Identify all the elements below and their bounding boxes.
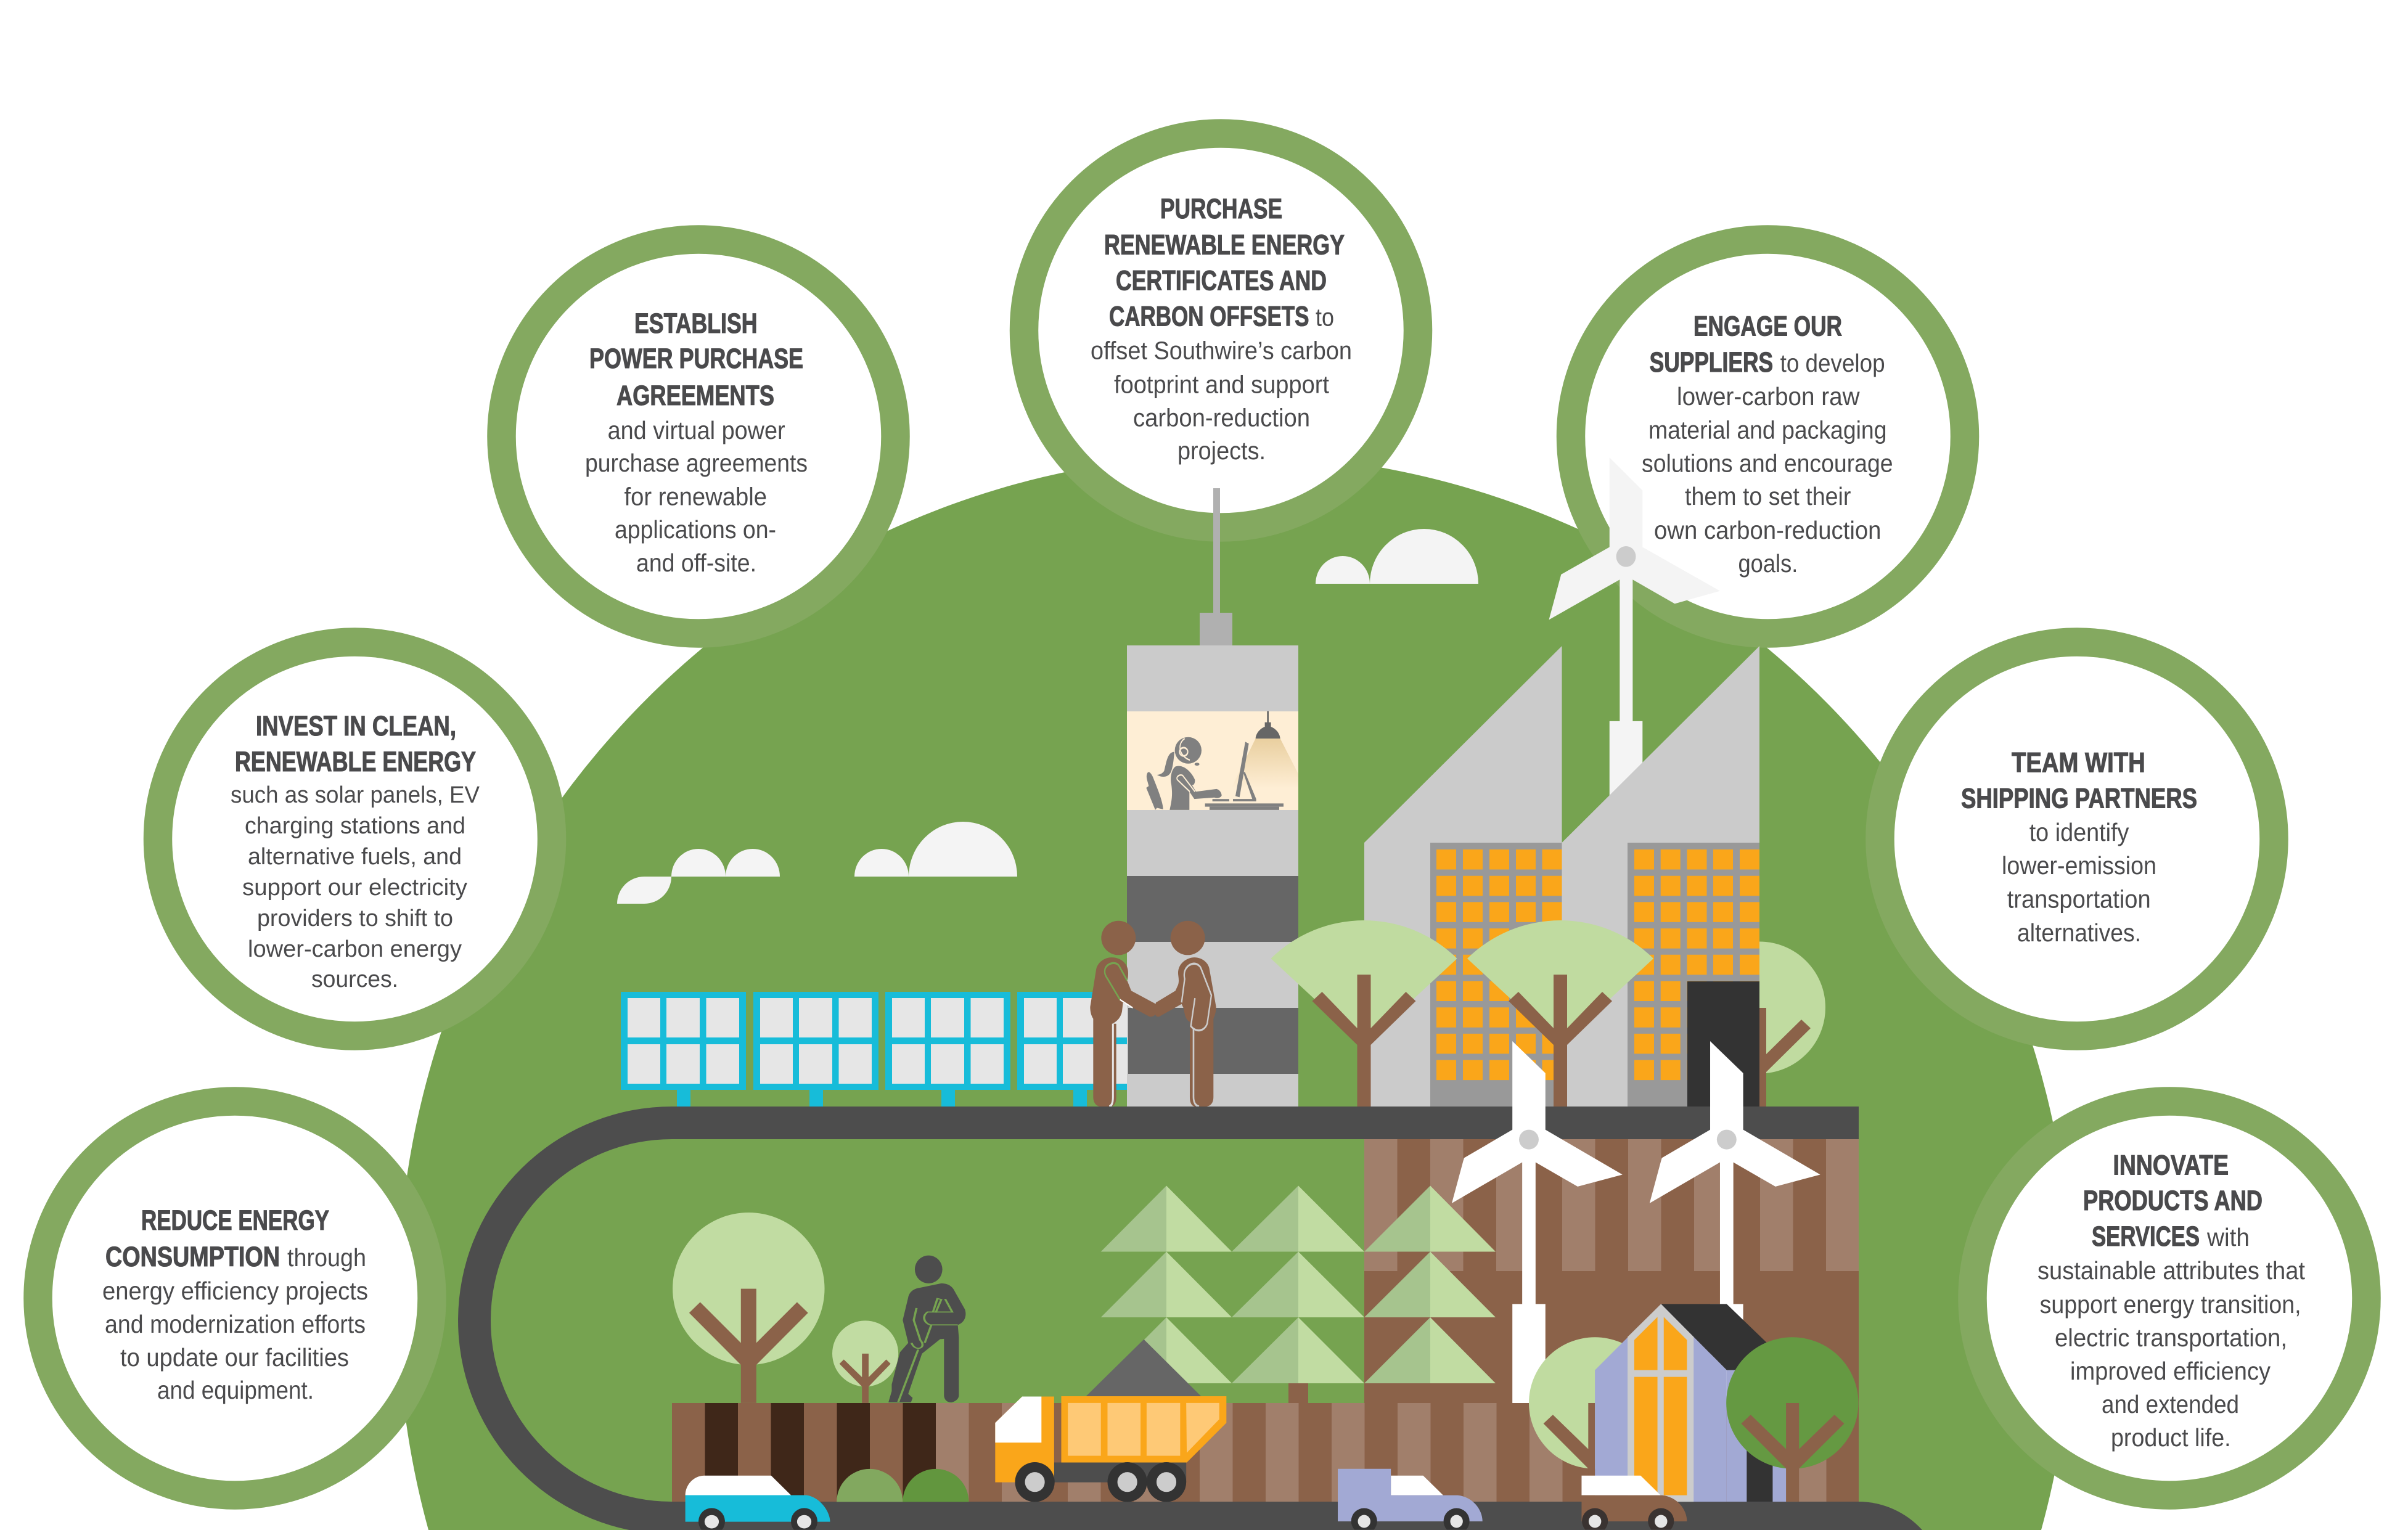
body text: support our electricity: [242, 875, 467, 901]
heading: ENGAGE OUR: [1693, 311, 1842, 342]
heading: CARBON OFFSETS: [1109, 301, 1309, 332]
heading: PURCHASE: [1160, 193, 1282, 224]
body text: solutions and encourage: [1642, 449, 1893, 478]
body text: alternatives.: [2017, 918, 2141, 947]
body text: and off-site.: [636, 549, 756, 577]
body text: carbon-reduction: [1133, 404, 1310, 432]
body text: sustainable attributes that: [2037, 1256, 2306, 1285]
solar panels: [621, 992, 1134, 1107]
panel: purchase renewable energy certificates: [1024, 133, 1418, 528]
body text: to identify: [2029, 818, 2129, 846]
clouds: [617, 529, 1478, 904]
body text: for renewable: [624, 482, 767, 510]
body text: electric transportation,: [2055, 1323, 2287, 1352]
icon: two people shaking hands: [1090, 921, 1216, 1107]
bushes: [837, 1469, 969, 1502]
heading: SUPPLIERS: [1650, 346, 1773, 378]
heading: ESTABLISH: [634, 308, 757, 339]
body text: purchase agreements: [585, 449, 808, 477]
body text: offset Southwire’s carbon: [1091, 337, 1352, 365]
heading: RENEWABLE ENERGY: [235, 746, 476, 777]
heading: INVEST IN CLEAN,: [256, 710, 456, 742]
body text: alternative fuels, and: [248, 844, 462, 870]
body text: and virtual power: [608, 416, 785, 444]
body text: lower-emission: [2002, 851, 2156, 880]
heading: SHIPPING PARTNERS: [1961, 783, 2197, 814]
panel: engage our suppliers: [1571, 239, 1965, 634]
body text: and extended: [2102, 1390, 2239, 1418]
pine trees: [1101, 1186, 1496, 1403]
icon: dump truck: [995, 1396, 1226, 1502]
body text: and modernization efforts: [105, 1310, 366, 1338]
body text: with: [2206, 1223, 2250, 1251]
road: [458, 1107, 1922, 1530]
icon: wind turbine 2: [1650, 1041, 1820, 1403]
body text: own carbon-reduction: [1654, 516, 1882, 544]
body text: transportation: [2007, 885, 2151, 914]
body text: sources.: [311, 967, 398, 992]
heading: SERVICES: [2092, 1221, 2200, 1252]
panel: reduce energy consumption: [38, 1101, 432, 1495]
icon: brown car: [1581, 1476, 1687, 1529]
lower wind turbines, house and vehicles: [1338, 1041, 1858, 1529]
body text: them to set their: [1685, 482, 1851, 510]
small tree: [832, 1320, 898, 1403]
body text: such as solar panels, EV: [231, 782, 480, 808]
fan tree 2: [1467, 920, 1653, 1107]
heading: [589, 308, 803, 411]
round tree behind factory: [1693, 942, 1825, 1107]
person left: [1090, 921, 1157, 1107]
person right: [1155, 921, 1216, 1107]
body text: applications on-: [615, 515, 776, 544]
large tree: [673, 1213, 825, 1403]
body text: improved efficiency: [2070, 1357, 2271, 1385]
body text: providers to shift to: [257, 906, 453, 931]
panel: innovate products and services: [1973, 1101, 2366, 1495]
dark green tree by house: [1726, 1337, 1858, 1502]
heading: CERTIFICATES AND: [1116, 265, 1327, 297]
icon: upper wind turbine: [1549, 457, 1720, 856]
body text: footprint and support: [1114, 370, 1330, 399]
heading: INNOVATE: [2113, 1149, 2229, 1180]
fan tree 1: [1271, 920, 1457, 1107]
icon: blue electric car: [686, 1476, 830, 1530]
light green tree by house: [1529, 1337, 1661, 1502]
lower landscape group: [673, 1213, 1226, 1530]
body text: material and packaging: [1648, 416, 1886, 444]
heading: TEAM WITH: [2012, 747, 2145, 779]
standing person: [888, 1256, 965, 1402]
body text: [102, 1243, 368, 1404]
panel: team with shipping partners: [1880, 642, 2274, 1036]
upper soil strata: [1364, 1139, 1859, 1403]
body text: [231, 782, 480, 992]
body text: through: [287, 1243, 366, 1272]
body text: lower-carbon energy: [248, 936, 462, 962]
body text: and equipment.: [157, 1376, 314, 1404]
factory building left: [1364, 646, 1562, 1107]
heading: [2083, 1149, 2263, 1252]
panel: establish power purchase agreements: [502, 239, 895, 634]
body text: [2037, 1223, 2306, 1452]
heading: [1961, 747, 2197, 814]
icon: purple van: [1338, 1469, 1483, 1529]
icon: house: [1595, 1304, 1798, 1502]
body text: lower-carbon raw: [1677, 382, 1860, 411]
body text: to: [1316, 303, 1334, 332]
body text: goals.: [1738, 549, 1798, 578]
factory building right: [1562, 646, 1759, 1107]
heading: [1104, 193, 1345, 332]
body text: energy efficiency projects: [102, 1277, 368, 1305]
body text: [1642, 349, 1893, 578]
icon: wind turbine 1: [1452, 1041, 1623, 1403]
body text: projects.: [1177, 436, 1266, 465]
body text: charging stations and: [245, 813, 465, 839]
heading: AGREEMENTS: [616, 380, 774, 411]
heading: [235, 710, 476, 777]
heading: RENEWABLE ENERGY: [1104, 229, 1345, 261]
body text: product life.: [2111, 1423, 2231, 1452]
gravel mound: [1086, 1340, 1201, 1396]
body text: to update our facilities: [120, 1343, 349, 1372]
factory door: [1687, 981, 1759, 1107]
body text: to develop: [1780, 349, 1885, 377]
heading: PRODUCTS AND: [2083, 1185, 2263, 1216]
lower soil strata: [672, 1403, 1859, 1502]
icon: woman at desk in office window: [1146, 711, 1298, 810]
heading: REDUCE ENERGY: [141, 1205, 329, 1236]
body text: support energy transition,: [2040, 1290, 2301, 1319]
heading line 2: CONSUMPTION: [105, 1241, 280, 1272]
body text: [1091, 303, 1352, 465]
body text: [585, 416, 808, 577]
heading: POWER PURCHASE: [589, 343, 803, 374]
panel: invest in clean renewable energy: [158, 642, 552, 1036]
heading: [1650, 311, 1842, 378]
green hill background: [398, 454, 2072, 1530]
office tower: [1127, 488, 1298, 1107]
body text: [2002, 818, 2156, 947]
